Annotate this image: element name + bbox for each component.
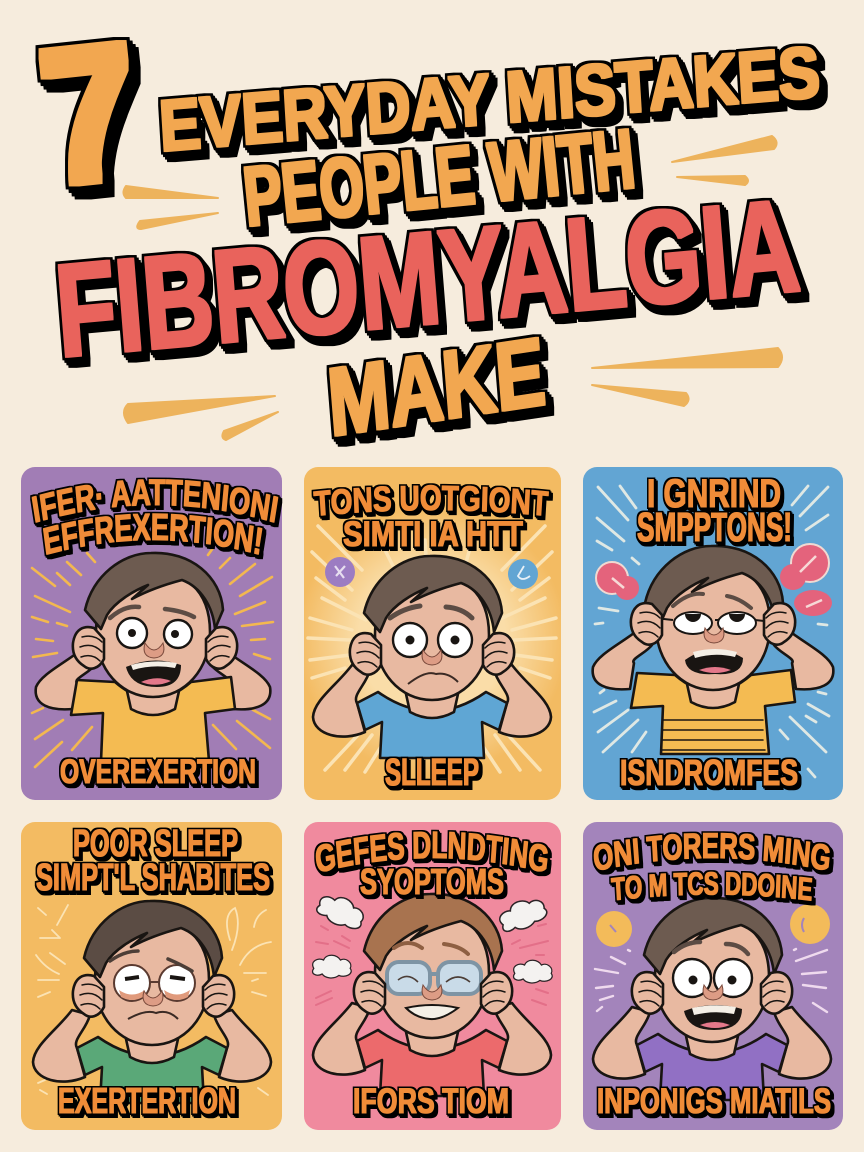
- card 5 strokes and clouds: [313, 890, 552, 1005]
- card 6 background: [583, 822, 843, 1130]
- card 3 heading: I GNRIND: [647, 472, 781, 516]
- card 5 background: [304, 822, 561, 1130]
- card 2 glow: [297, 505, 567, 775]
- card 2 icons: [325, 557, 538, 589]
- card 2 heading: [312, 483, 553, 554]
- card 3 heading: [637, 472, 792, 550]
- card 5 label: IFORS TIOM: [353, 1082, 509, 1121]
- card 5 heading: [314, 830, 552, 902]
- card 2 character: [313, 556, 551, 758]
- card 3 background: [583, 467, 843, 800]
- card 1 character: [36, 553, 270, 761]
- panel: card 2 sleep: [304, 467, 561, 800]
- title block: [32, 3, 822, 457]
- title text: [51, 32, 822, 457]
- decorative title streaks: [124, 136, 782, 440]
- panel: card 3 syndromes: [583, 467, 843, 800]
- card 1 heading: EFFREXERTION!: [42, 512, 266, 560]
- card 1 rays: [32, 548, 273, 767]
- panel: card 4 exertion: [21, 822, 282, 1130]
- card 4 character: [33, 901, 271, 1103]
- title text: PEOPLE WITH: [239, 111, 639, 244]
- card 5 heading: SYOPTOMS: [360, 861, 504, 902]
- card 5 character: [313, 894, 551, 1096]
- card 6 character: [593, 898, 831, 1100]
- title number 7: 7: [32, 3, 147, 224]
- card 3 character: [593, 546, 833, 754]
- card 2 label: SLLEEP: [385, 752, 479, 794]
- panel: card 1 overexertion: [21, 467, 282, 800]
- card 2 sunburst rays: [308, 526, 556, 772]
- card 6 heading: [592, 831, 834, 906]
- title text: MAKE: [324, 317, 549, 457]
- card 3 rays: [594, 486, 829, 777]
- card 3 red swelling blobs: [596, 544, 832, 616]
- card 6 marks and circles: [595, 904, 830, 1012]
- card 4 heading: [36, 823, 270, 899]
- card 6 heading: ONI TORERS MING: [592, 831, 834, 875]
- card 3 label: ISNDROMFES: [620, 752, 798, 793]
- card 2 heading: TONS UOTGIONT: [312, 483, 553, 520]
- card 4 label: EXERTERTION: [58, 1080, 236, 1121]
- card 2 heading: SIMTI IA HTT: [343, 515, 523, 554]
- card 4 background: [21, 822, 282, 1130]
- card 4 heading: POOR SLEEP: [73, 823, 238, 865]
- card 4 heading: SIMPT'L SHABITES: [36, 857, 270, 899]
- card 1 heading: [30, 478, 282, 560]
- card 1 label: OVEREXERTION: [60, 753, 256, 791]
- card 4 sketch marks: [36, 905, 271, 1095]
- card 1 heading: IFER· AATTENIONI: [30, 478, 282, 528]
- panel: card 5 fog symptoms: [304, 822, 561, 1130]
- card 2 background: [304, 467, 561, 800]
- panel: card 6 inponigs miatiles: [583, 822, 843, 1130]
- card 6 heading: TO M TCS DDOINE: [609, 870, 816, 906]
- card 5 heading: GEFES DLNDTING: [314, 830, 552, 876]
- card 1 background: [21, 467, 282, 800]
